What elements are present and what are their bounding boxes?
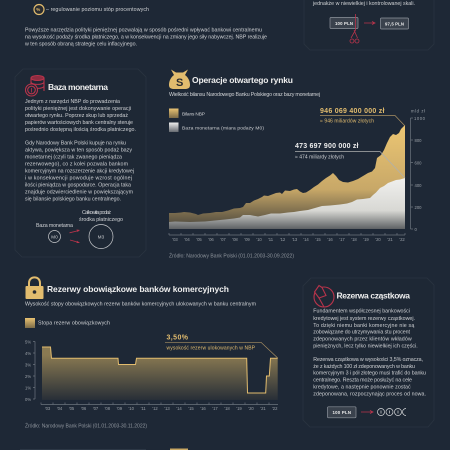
icon: scissors [350,14,359,43]
panel: devaluation note [304,0,434,50]
x axis: '05 [69,406,75,411]
icon: padlock [26,277,44,299]
area chart: NBP balance and monetary base [169,125,405,229]
heading: Baza monetarna [48,82,108,92]
text block: second paragraph: i w konsekwencji powoduje wzrost ogólnej [25,176,132,182]
x axis: '12 [152,406,158,411]
text block: first paragraph: otwartego rynku. Poprzez skup lub sprzedaż [25,113,128,119]
panel: monetary base [15,69,146,257]
legend: monetary base: Baza monetarna (miara podaży M0) [182,126,264,132]
callout: 3.50% reserve: wysokość rezerw ulokowanych w NBP [166,346,256,352]
x axis: '12 [280,237,286,242]
x axis: '09 [117,406,123,411]
x axis: '13 [164,406,170,411]
x axis: '07 [220,237,226,242]
text block: second paragraph: centralnego. Reszta może posłużyć na cele [313,378,412,384]
legend: NBP balance [169,108,205,118]
x axis: '11 [141,406,146,411]
text block: second paragraph: ilości pieniądza w gospodarce. Operacja taka [25,183,131,189]
callout: monetary base value: 473 697 900 000 zł [295,143,359,150]
text block: first paragraph: zobowiązane do utrzymywania stu procent [313,330,411,336]
subtitle: Wysokość stopy obowiązkowych rezerw banków komercyjnych ulokowanych w banku centralnym [25,302,257,308]
y axis [410,108,426,232]
x axis [169,233,405,242]
x axis: '17 [339,237,345,242]
icon: money bag: S [176,77,183,89]
diagram: M0 to M3 [36,210,123,248]
x axis: '15 [315,237,321,242]
heading: reserve requirements: Rezerwy obowiązkowe banków komercyjnych [47,284,229,294]
icon: banknote 100 PLN: 100 PLN [332,410,351,415]
callout: NBP balance value: 946 069 400 000 zł [320,108,385,115]
x axis: '19 [363,237,369,242]
callout: NBP balance value [320,108,405,126]
icon: pie chart [314,286,334,307]
text block: intro conclusion [25,28,267,48]
diagram: M0 to M3: środka płatniczego [79,217,123,223]
y axis: 2% [25,374,31,379]
y axis: 5% [25,339,31,344]
text block: second paragraph: rezerwowego), co z kolei pozwala bankom [25,162,129,168]
panel: fractional reserve [303,278,434,427]
x axis: '22 [399,237,405,242]
text block: intro conclusion: Powyższe narzędzia polityki pieniężnej pozwalają w sposób pośredni wpływać bankowi centralnemu [25,28,262,34]
icon: banknote 100 PLN [328,407,356,418]
x axis: '21 [260,406,266,411]
y axis: 0% [25,397,31,402]
next panel top edge [20,448,146,450]
source note: Źródło: Narodowy Bank Polski (01.01.2003-30.11.2022) [25,422,147,430]
text block: second paragraph: komercyjnym 3 i pół złotego musi trafić do banku [313,370,426,376]
text block: second paragraph: monetarnej (czyli tak zwanego pieniądza [25,155,122,161]
x axis: '20 [248,406,254,411]
y axis: mld zł [411,108,425,114]
x axis: '14 [303,237,309,242]
text block: second paragraph: aktywa, powiększa w ten sposób podaż bazy [25,148,132,154]
legend: reserve rate [25,318,110,328]
subtitle: Wielkość bilansu Narodowego Banku Polskiego oraz bazy monetarnej [169,92,320,98]
callout: monetary base value: ≈ 474 miliardy złotych [295,154,344,160]
text block: second paragraph: znajduje odzwierciedlenie w powiększającym [25,190,134,196]
arrow [361,410,373,414]
y axis: 600 [414,160,422,166]
list item: interest rates: – regulowanie poziomu stóp procentowych [46,7,149,13]
x axis [41,402,278,411]
y axis: 1% [25,385,31,390]
icon: coins [378,408,406,416]
arrow [364,22,375,24]
text block: first paragraph: Jednym z narzędzi NBP do prowadzenia [25,99,120,105]
text block: intro conclusion: w ten sposób obraną strategię celu inflacyjnego. [25,42,137,48]
icon: banknote 97.5 PLN: 97,5 PLN [385,22,404,26]
diagram: M0 to M3: M0 [51,234,58,239]
x axis: '09 [244,237,250,242]
icon: coins [26,76,44,96]
x axis: '06 [81,406,87,411]
callout: 3.50% reserve: 3,50% [166,334,189,342]
legend: NBP balance: Bilans NBP [182,112,205,118]
text block: first paragraph: polityki pieniężnej jest dokonywanie operacji [25,106,131,112]
x axis: '10 [128,406,135,411]
x axis: '07 [93,406,99,411]
callout: NBP balance value: ≈ 946 miliardów złotych [320,118,374,124]
x axis: '18 [224,406,230,411]
list item: interest rates [34,4,149,14]
text block: intro conclusion: na wysokość podaży środka płatniczego, a w konsekwencji na zmiany jego siły nabywczej. NBP realizuje [25,34,267,40]
heading: open market operations: Operacje otwartego rynku [192,75,293,85]
callout: monetary base value [295,143,405,178]
x axis: '06 [208,237,214,242]
diagram: M0 to M3: M3 [98,234,105,239]
icon: banknote 100 PLN: 100 PLN [335,21,353,26]
x axis: '03 [172,237,178,242]
y axis: 3% [25,362,31,367]
text block: second paragraph: Gdy Narodowy Bank Polski kupuje na rynku [25,141,126,147]
y axis: 4% [25,351,31,356]
legend: monetary base [169,122,264,132]
list item: interest rates: % [36,7,40,12]
diagram: M0 to M3: Całkowita podaż [82,210,111,216]
x axis: '05 [196,237,202,242]
y axis: 0 [414,227,418,232]
x axis: '19 [236,406,242,411]
heading: Rezerwa cząstkowa [336,291,410,301]
text block: first paragraph: kredytowej jest system rezerwy cząstkowej. [313,316,415,322]
icon: money bag [169,70,190,89]
y axis: 1000 [414,116,426,121]
next icon top [170,448,188,450]
text block: first paragraph: Fundamentem współczesnej bankowości [313,308,410,314]
x axis: '04 [184,237,190,242]
x axis: '11 [268,237,274,242]
x axis: '08 [105,406,111,411]
text block: second paragraph: że z każdych 100 zł zdeponowanych w banku [313,364,415,370]
x axis: '21 [387,237,393,242]
text block: first paragraph: papierów wartościowych bank centralny steruje [25,120,133,126]
text block: first paragraph [25,99,136,133]
x axis: '16 [200,406,206,411]
x axis: '20 [375,237,381,242]
x axis: '13 [292,237,298,242]
text block: second paragraph [313,357,426,398]
x axis: '22 [272,406,278,411]
text block: first paragraph: To dzięki niemu banki komercyjne nie są [313,323,414,329]
y axis: 800 [414,138,422,143]
callout: 3.50% reserve [165,334,278,358]
x axis: '08 [232,237,238,242]
x axis: '03 [45,406,51,411]
text block: second paragraph: komercyjnym na rozszerzenie akcji kredytowej [25,169,134,175]
text block: second paragraph: kredytowe, a następnie ponownie zostać [313,384,411,390]
text block: second paragraph: Rezerwa cząstkowa w wysokości 3,5% oznacza, [313,357,423,363]
text block: second paragraph: się bilansie polskiego banku centralnego. [25,197,121,203]
x axis: '14 [176,406,182,411]
x axis: '17 [212,406,218,411]
text block: first paragraph: zdeponowanych przez klientów wkładów [313,336,412,342]
x axis: '16 [327,237,333,242]
y axis: 200 [414,205,422,210]
text block: first paragraph: pieniężnych, lecz tylko niewielkiej ich części. [313,344,418,350]
legend: reserve rate: Stopa rezerw obowiązkowych [38,320,110,326]
x axis: '10 [256,237,262,242]
source note: Źródło: Narodowy Bank Polski (01.01.2003-30.09.2022) [169,252,294,260]
area: NBP balance [169,125,405,229]
x axis: '18 [351,237,357,242]
x axis: '15 [188,406,194,411]
area: monetary base [169,178,405,229]
x axis: '04 [57,406,63,411]
y axis [25,339,35,402]
text block: second paragraph [25,141,134,203]
diagram: M0 to M3: Baza monetarna [36,223,73,229]
panel: devaluation note: jednakże w niewielkiej i kontrolowanej skali. [312,1,415,7]
text block: second paragraph: zdeponowana, rozpoczynając proces od nowa. [313,392,426,398]
text block: first paragraph [313,308,418,350]
y axis: 400 [414,183,422,188]
text block: first paragraph: pośrednio dostępną ilością środka płatniczego. [25,127,136,133]
area chart: reserve rate [42,347,278,400]
